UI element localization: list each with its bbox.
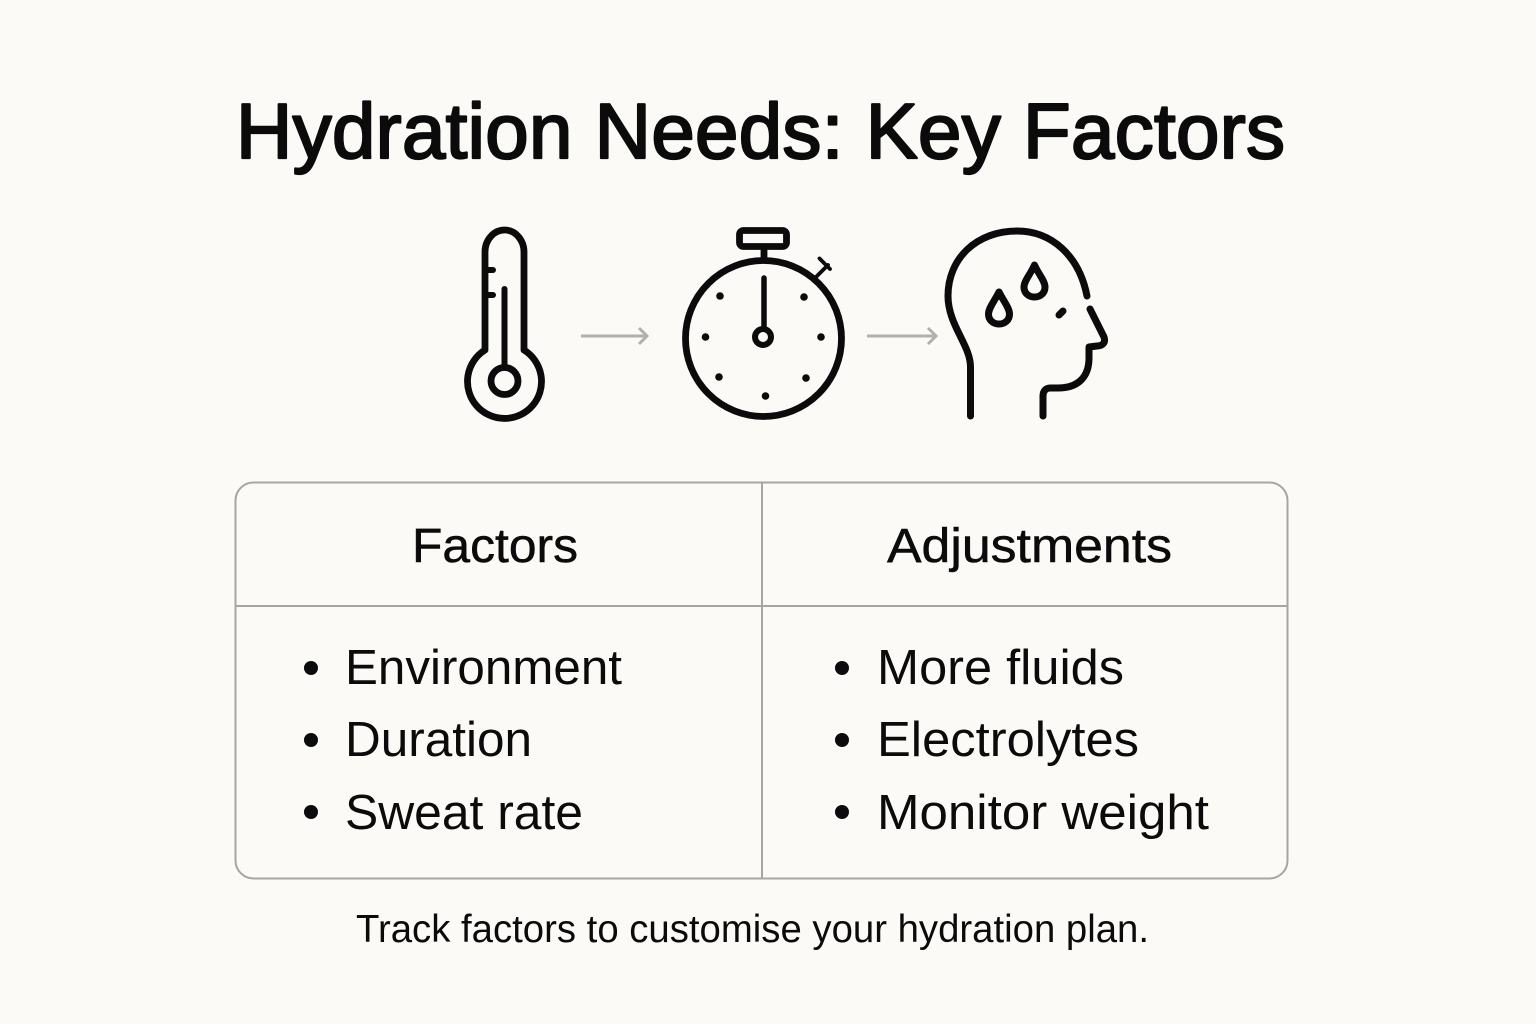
- arrow: stopwatch to head: [867, 328, 936, 344]
- adjustments list: More fluids: [877, 641, 1124, 695]
- column heading: adjustments: Adjustments: [887, 520, 1172, 573]
- factors list: Environment: [345, 641, 622, 695]
- factors list: Sweat rate: [345, 786, 583, 840]
- icon: sweating head: [948, 231, 1105, 416]
- column divider: [761, 483, 763, 878]
- footer caption: Track factors to customise your hydration plan.: [356, 908, 1149, 951]
- header divider: [236, 605, 1287, 607]
- adjustments list: [835, 641, 1209, 840]
- factors list: [304, 641, 622, 840]
- column heading: factors: Factors: [412, 520, 578, 573]
- adjustments list: Monitor weight: [877, 786, 1209, 840]
- factors list: Duration: [345, 713, 532, 767]
- icon: thermometer: [468, 230, 542, 418]
- table panel: [236, 482, 1288, 878]
- title: Hydration Needs: Key Factors: [236, 87, 1285, 175]
- table frame: [236, 482, 1288, 878]
- adjustments list: Electrolytes: [877, 713, 1139, 767]
- icon: stopwatch: [686, 230, 842, 416]
- arrow: thermometer to stopwatch: [581, 328, 647, 344]
